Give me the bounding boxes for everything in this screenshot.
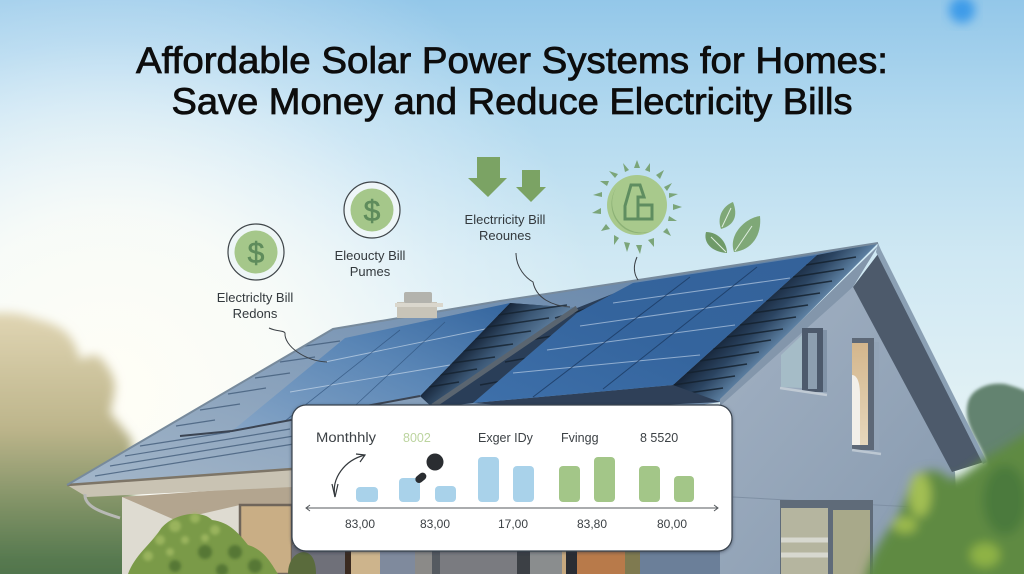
icon: sun with house bbox=[592, 160, 682, 254]
roof band below arrays bbox=[473, 385, 720, 410]
green bars bbox=[559, 457, 694, 502]
connector sun bbox=[634, 257, 638, 280]
lower right roof edge bbox=[720, 246, 878, 406]
callout label centre: Pumes bbox=[350, 264, 391, 279]
solar panel array left bbox=[180, 303, 510, 436]
fascia bbox=[67, 469, 292, 497]
lower glass door bbox=[780, 500, 873, 574]
left lower wall bbox=[122, 490, 295, 574]
gable wall bbox=[720, 287, 960, 574]
chart headings: 8002 bbox=[403, 431, 431, 445]
upper window left bbox=[780, 328, 827, 395]
callout label left bbox=[217, 290, 293, 321]
icon: dollar coin left: $ bbox=[248, 237, 265, 270]
callout label centre bbox=[335, 248, 406, 279]
gable trim bbox=[876, 243, 987, 464]
blue bars bbox=[356, 457, 534, 502]
axis values: 83,80 bbox=[577, 517, 607, 531]
chart headings: 8 5520 bbox=[640, 431, 678, 445]
trend arrow bbox=[332, 454, 365, 497]
house bbox=[67, 243, 987, 574]
axis values: 83,00 bbox=[345, 517, 375, 531]
shrub lower left bbox=[128, 513, 316, 574]
eave edge bbox=[67, 469, 292, 485]
callout label centre: Eleoucty Bill bbox=[335, 248, 406, 263]
axis values bbox=[345, 517, 687, 531]
gutter downpipe bbox=[85, 494, 120, 518]
callout label arrows: Reounes bbox=[479, 228, 532, 243]
shaded shingles between arrays bbox=[420, 283, 640, 408]
chart headings: Monthhly bbox=[316, 430, 376, 445]
background tree right bbox=[967, 384, 1024, 480]
eave shadow bbox=[122, 485, 292, 520]
axis values: 83,00 bbox=[420, 517, 450, 531]
roof shingle lines left bbox=[95, 341, 340, 476]
soffit bbox=[853, 254, 984, 472]
ridge edge bbox=[67, 243, 878, 485]
upper window right bbox=[852, 338, 881, 454]
title: Save Money and Reduce Electricity Bills bbox=[172, 81, 852, 122]
dark marker bbox=[414, 454, 444, 485]
axis bbox=[306, 505, 718, 511]
axis values: 17,00 bbox=[498, 517, 528, 531]
callout label arrows: Electrricity Bill bbox=[465, 212, 546, 227]
chart headings: Fvingg bbox=[561, 431, 599, 445]
icon: dollar coin centre: $ bbox=[364, 195, 381, 228]
background tree left bbox=[0, 313, 135, 574]
icon: dollar coin centre bbox=[344, 182, 400, 238]
lower left window bbox=[240, 505, 292, 574]
callout label left: Electriclty Bill bbox=[217, 290, 293, 305]
title bbox=[136, 40, 888, 122]
roof surface bbox=[67, 243, 878, 485]
connector left bbox=[269, 328, 327, 362]
solar panel array right bbox=[473, 255, 817, 403]
axis values: 80,00 bbox=[657, 517, 687, 531]
shaded shingles right of array bbox=[640, 243, 878, 402]
callout label left: Redons bbox=[233, 306, 278, 321]
callout label arrows bbox=[465, 212, 546, 243]
chart headings bbox=[316, 430, 678, 445]
foreground bush right bbox=[860, 425, 1024, 574]
icon: leaves bbox=[705, 202, 760, 253]
wall floor line bbox=[733, 497, 913, 507]
panel: monthly savings chart card bbox=[292, 405, 732, 551]
title: Affordable Solar Power Systems for Homes: bbox=[136, 40, 888, 81]
chimney vent bbox=[395, 292, 443, 318]
icon: dollar coin left bbox=[228, 224, 284, 280]
icon: down arrows bbox=[468, 157, 546, 202]
connector arrows bbox=[516, 253, 570, 307]
ground floor strip below card bbox=[292, 545, 720, 574]
chart headings: Exger IDy bbox=[478, 431, 534, 445]
